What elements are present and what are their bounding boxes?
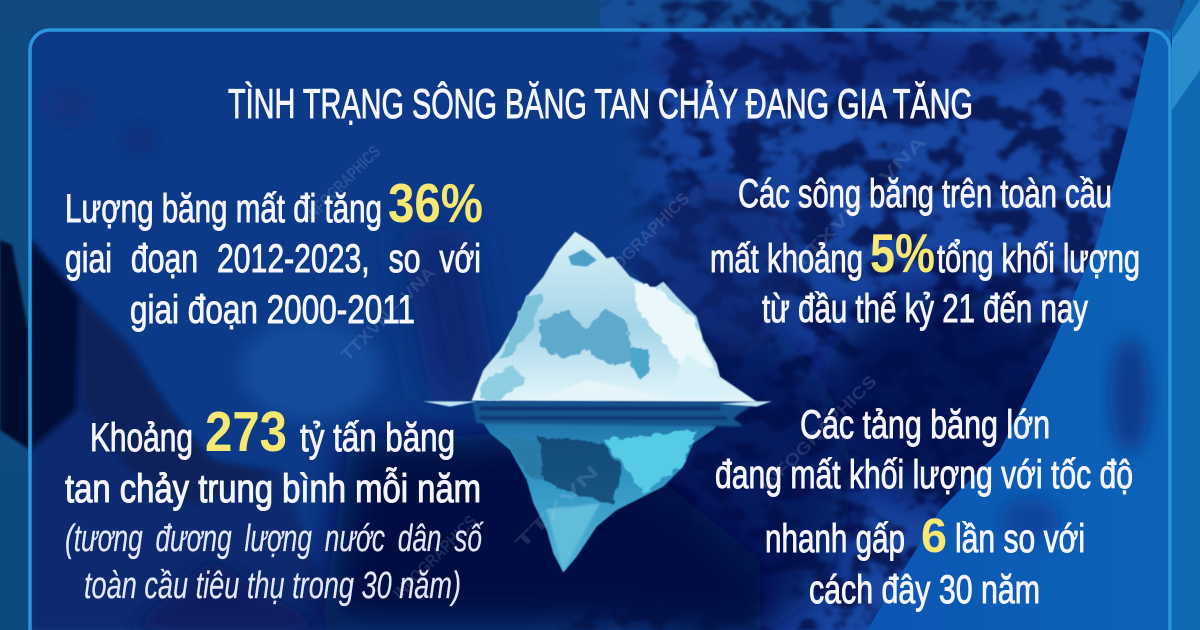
text block: 273 billion tons: toàn cầu tiêu thụ trong 30 năm): [84, 565, 461, 607]
stat: 5%: 5%: [870, 222, 935, 284]
watermarks: INFOGRAPHICS: [589, 189, 693, 293]
icon: iceberg: [423, 232, 772, 573]
text block: 5% global glacier mass: từ đầu thế kỷ 21 đến nay: [762, 287, 1088, 331]
watermarks: TTXVN – VNA: [789, 132, 930, 273]
text block: 273 billion tons: tan chảy trung bình mỗi năm: [65, 466, 481, 511]
text block: 36% ice loss: giai đoạn 2000-2011: [130, 288, 415, 332]
text block: ice sheets 6 times faster: [715, 403, 1133, 612]
text block: 36% ice loss: Lượng băng mất đi tăng: [65, 187, 382, 231]
iceberg underwater part: [475, 410, 717, 573]
text block: ice sheets 6 times faster: Các tảng băng lớn: [800, 403, 1050, 447]
watermarks: [301, 132, 930, 603]
stat: 6: 6: [921, 510, 947, 563]
text block: ice sheets 6 times faster: nhanh gấp: [765, 517, 905, 561]
text block: 5% global glacier mass: mất khoảng: [710, 237, 863, 281]
iceberg water surface: [423, 401, 772, 427]
watermarks: TTXVN: [511, 462, 603, 553]
stat: 273: 273: [205, 400, 287, 464]
text block: 273 billion tons: Khoảng: [90, 416, 193, 460]
text block: 273 billion tons: (tương đương lượng nước dân số: [65, 518, 484, 560]
text block: 273 billion tons: tỷ tấn băng: [300, 416, 455, 460]
text block: 273 billion tons: [65, 400, 484, 607]
text block: 36% ice loss: giai đoạn 2012-2023, so với: [65, 237, 481, 281]
stat: 36%: 36%: [388, 172, 483, 234]
watermarks: INFOGRAPHICS: [301, 142, 384, 225]
text block: ice sheets 6 times faster: cách đây 30 năm: [809, 568, 1040, 612]
watermarks: INFOGRAPHICS: [757, 372, 880, 495]
watermarks: TTXVN – VNA: [337, 263, 439, 365]
iceberg above water: [472, 232, 757, 402]
text block: 36% ice loss: [65, 172, 483, 332]
text block: ice sheets 6 times faster: lần so với: [955, 517, 1085, 561]
text block: 5% global glacier mass: [710, 172, 1140, 331]
watermarks: INFOGRAPHICS: [389, 512, 481, 603]
